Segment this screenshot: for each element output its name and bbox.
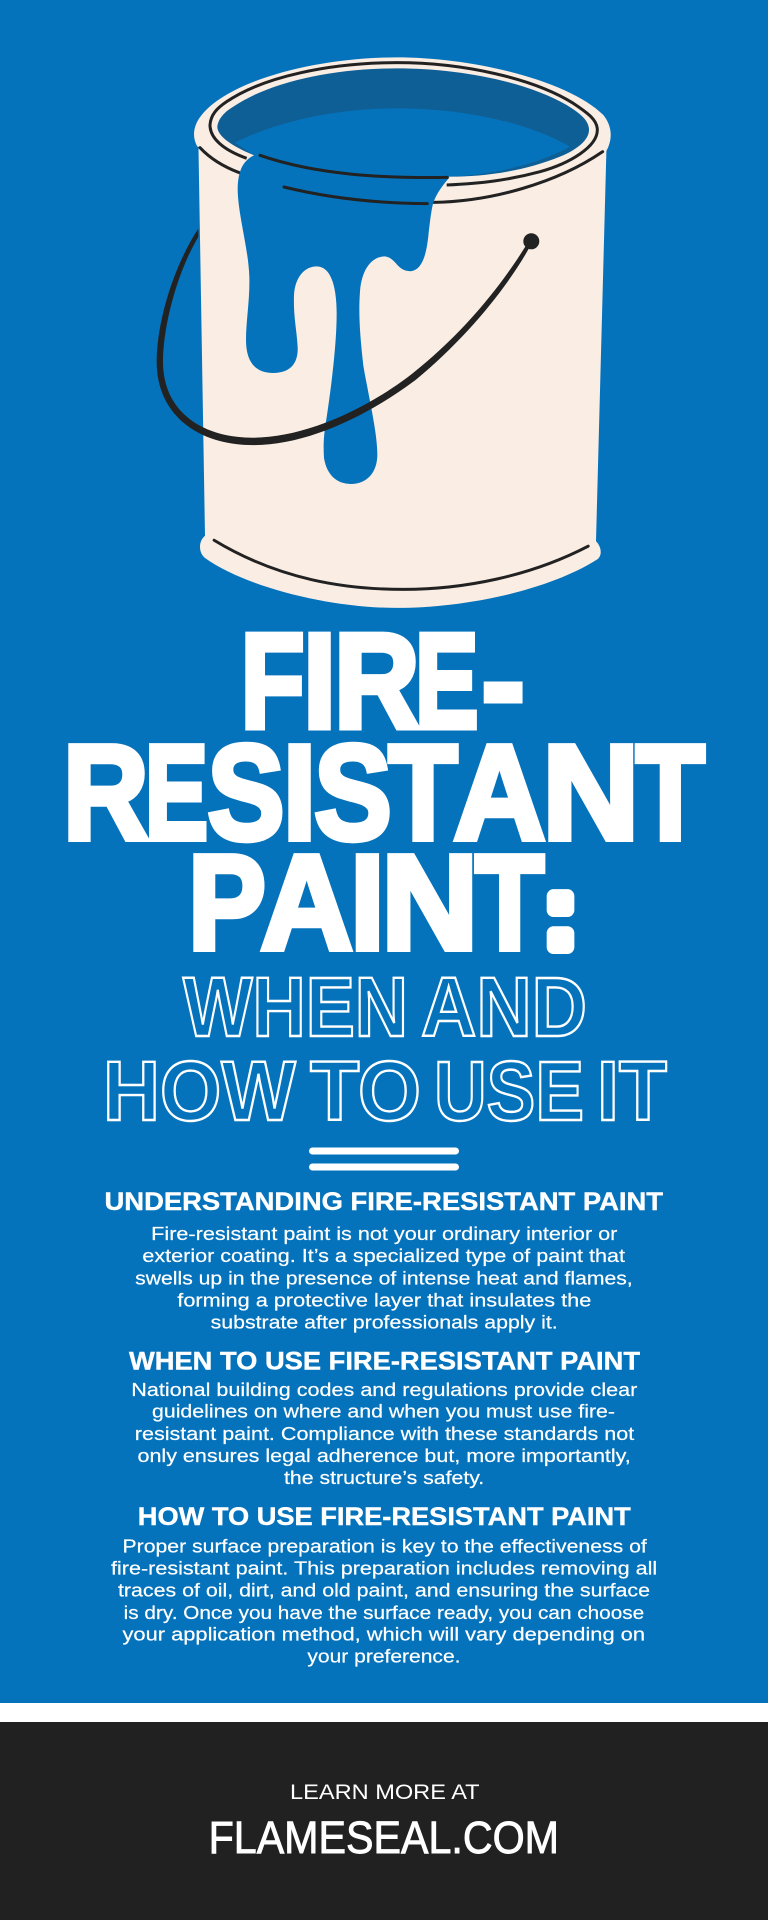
subtitle line 2: IT: [597, 1044, 667, 1138]
footer call to action: [209, 1780, 559, 1863]
body text: resistant paint. Compliance with these standards not: [135, 1423, 634, 1444]
rim outer shape: [194, 57, 611, 152]
section: understanding: [104, 1188, 663, 1332]
title line 1: R: [334, 606, 420, 756]
body text: fire-resistant paint. This preparation includes removing all: [111, 1557, 657, 1578]
body text: your preference.: [307, 1646, 460, 1667]
title line 2: I: [283, 717, 316, 868]
heading: UNDERSTANDING FIRE-RESISTANT PAINT: [104, 1188, 663, 1216]
paint drip: [238, 155, 449, 484]
title line 3: :: [544, 857, 577, 969]
body text: Proper surface preparation is key to the effectiveness of: [122, 1535, 648, 1556]
title line 3: T: [475, 827, 544, 978]
subtitle line 1: WHEN: [183, 960, 408, 1054]
heading: HOW TO USE FIRE-RESISTANT PAINT: [138, 1503, 631, 1531]
bucket interior shadow: [217, 68, 589, 177]
body text: traces of oil, dirt, and old paint, and ensuring the surface: [118, 1580, 650, 1601]
handle rivet: [523, 233, 539, 249]
title line 2: R: [63, 717, 149, 868]
body text: swells up in the presence of intense heat and flames,: [135, 1267, 633, 1288]
title line 1: I: [303, 606, 336, 756]
subtitle line 2: [103, 1044, 667, 1138]
body text: Fire-resistant paint is not your ordinary interior or: [151, 1223, 617, 1244]
title line 2: A: [454, 717, 545, 868]
title line 1: E: [415, 606, 478, 756]
title line 2: N: [542, 717, 639, 868]
rim lower line right: [433, 152, 603, 202]
website: FLAMESEAL.COM: [209, 1812, 559, 1863]
subtitle line 2: USE: [434, 1044, 584, 1138]
bucket rim: [194, 57, 611, 202]
heading: WHEN TO USE FIRE-RESISTANT PAINT: [129, 1347, 640, 1375]
title line 3: P: [188, 827, 266, 978]
bucket body: [198, 139, 607, 608]
paint surface: [235, 108, 570, 178]
body text: [131, 1379, 637, 1488]
subtitle line 2: TO: [310, 1044, 421, 1138]
title line 3: I: [350, 827, 385, 978]
bucket base line: [214, 540, 588, 589]
title line 1: F: [241, 606, 305, 756]
subtitle outlined: [103, 960, 667, 1138]
title line 2: T: [636, 717, 705, 868]
body text: only ensures legal adherence but, more importantly,: [138, 1445, 631, 1466]
rim line: [210, 63, 597, 185]
body text: the structure’s safety.: [284, 1467, 484, 1488]
title line 3: A: [260, 827, 353, 978]
title line 3: N: [381, 827, 478, 978]
body text: National building codes and regulations provide clear: [131, 1379, 637, 1400]
section: when to use: [129, 1347, 640, 1488]
icon: paint bucket: [157, 57, 611, 608]
learn more label: LEARN MORE AT: [290, 1780, 480, 1804]
bucket handle: [157, 229, 530, 445]
subtitle line 1: AND: [421, 960, 587, 1054]
rim lines over paint: [260, 155, 447, 204]
section: how to use: [111, 1503, 657, 1667]
body text: is dry. Once you have the surface ready, you can choose: [124, 1602, 644, 1623]
title line 2: T: [388, 717, 458, 868]
title line 1: -: [482, 606, 525, 756]
footer panel: [0, 1722, 768, 1920]
body text: forming a protective layer that insulates the: [177, 1289, 591, 1310]
body text: your application method, which will vary depending on: [122, 1624, 645, 1645]
body text: substrate after professionals apply it.: [211, 1311, 558, 1332]
body text: [111, 1535, 657, 1667]
subtitle line 1: [183, 960, 587, 1054]
body text: exterior coating. It’s a specialized type of paint that: [142, 1245, 625, 1266]
double bar divider: [309, 1148, 459, 1170]
title line 2: S: [314, 717, 392, 868]
title line 2: E: [145, 717, 208, 868]
title line 2: S: [208, 717, 284, 868]
rim lower line left: [200, 148, 239, 173]
body text: guidelines on where and when you must use fire-: [152, 1401, 615, 1422]
body text: [135, 1223, 633, 1332]
white separator strip: [0, 1703, 768, 1722]
title: [63, 606, 705, 978]
subtitle line 2: HOW: [103, 1044, 296, 1138]
